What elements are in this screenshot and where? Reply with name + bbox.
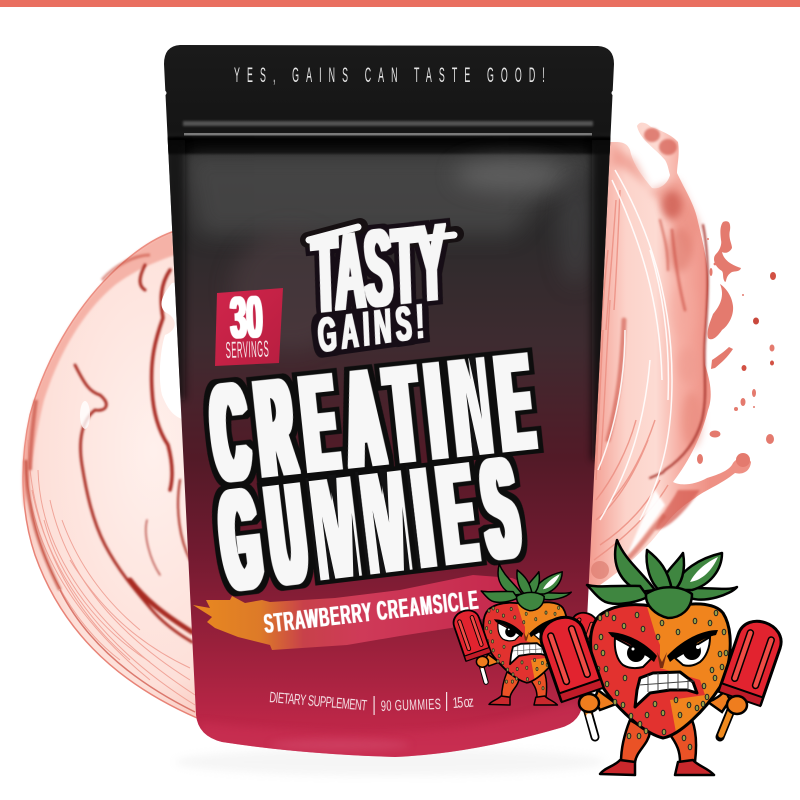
logo: Tasty Gains: TASTY [306,202,454,336]
white gap in the left swirl [160,280,190,420]
logo: Tasty Gains: GAINS! [314,296,428,363]
left popsicle [536,612,603,702]
headline: creatine gummies: GUMMIES [213,430,525,621]
badge: 30 servings: SERVINGS [225,336,269,363]
footer: product details [269,689,474,715]
headline: creatine gummies: CREATINE [205,324,538,510]
logo: Tasty Gains: TASTY [306,202,454,336]
green leaves [587,540,737,618]
arms [594,690,730,712]
liquid droplets [697,221,776,467]
product pouch [162,45,616,760]
flavor name: STRAWBERRY CREAMSICLE [262,585,480,639]
badge: 30 servings [215,284,283,366]
logo: Tasty Gains: GAINS! [314,296,428,363]
footer: product details: 15 oz [452,693,474,711]
large strawberry mascot [536,540,786,775]
badge: 30 servings: 30 [229,284,264,351]
legs [621,720,696,762]
footer: product details: DIETARY SUPPLEMENT [269,689,368,714]
liquid splash: right wave [580,123,751,590]
bag ground shadow [175,748,605,776]
tagline: YES, GAINS CAN TASTE GOOD! [234,64,545,87]
right popsicle [719,616,786,706]
angry eyes and brows [608,630,718,668]
headline: creatine gummies: CREATINE [205,324,538,510]
flavor swoosh [193,575,540,650]
shoes [600,760,714,775]
snarling mouth [635,672,697,707]
headline: creatine gummies: GUMMIES [213,430,525,621]
left popsicle stick [582,690,595,737]
small strawberry mascot on pouch [450,564,601,705]
top accent bar [0,0,800,7]
footer: product details: 90 GUMMIES [381,696,441,715]
right popsicle stick [720,693,738,737]
hands [579,694,747,714]
liquid splash: left swirl [22,232,260,718]
strawberry body [586,590,745,750]
headline: creatine gummies [205,324,538,621]
